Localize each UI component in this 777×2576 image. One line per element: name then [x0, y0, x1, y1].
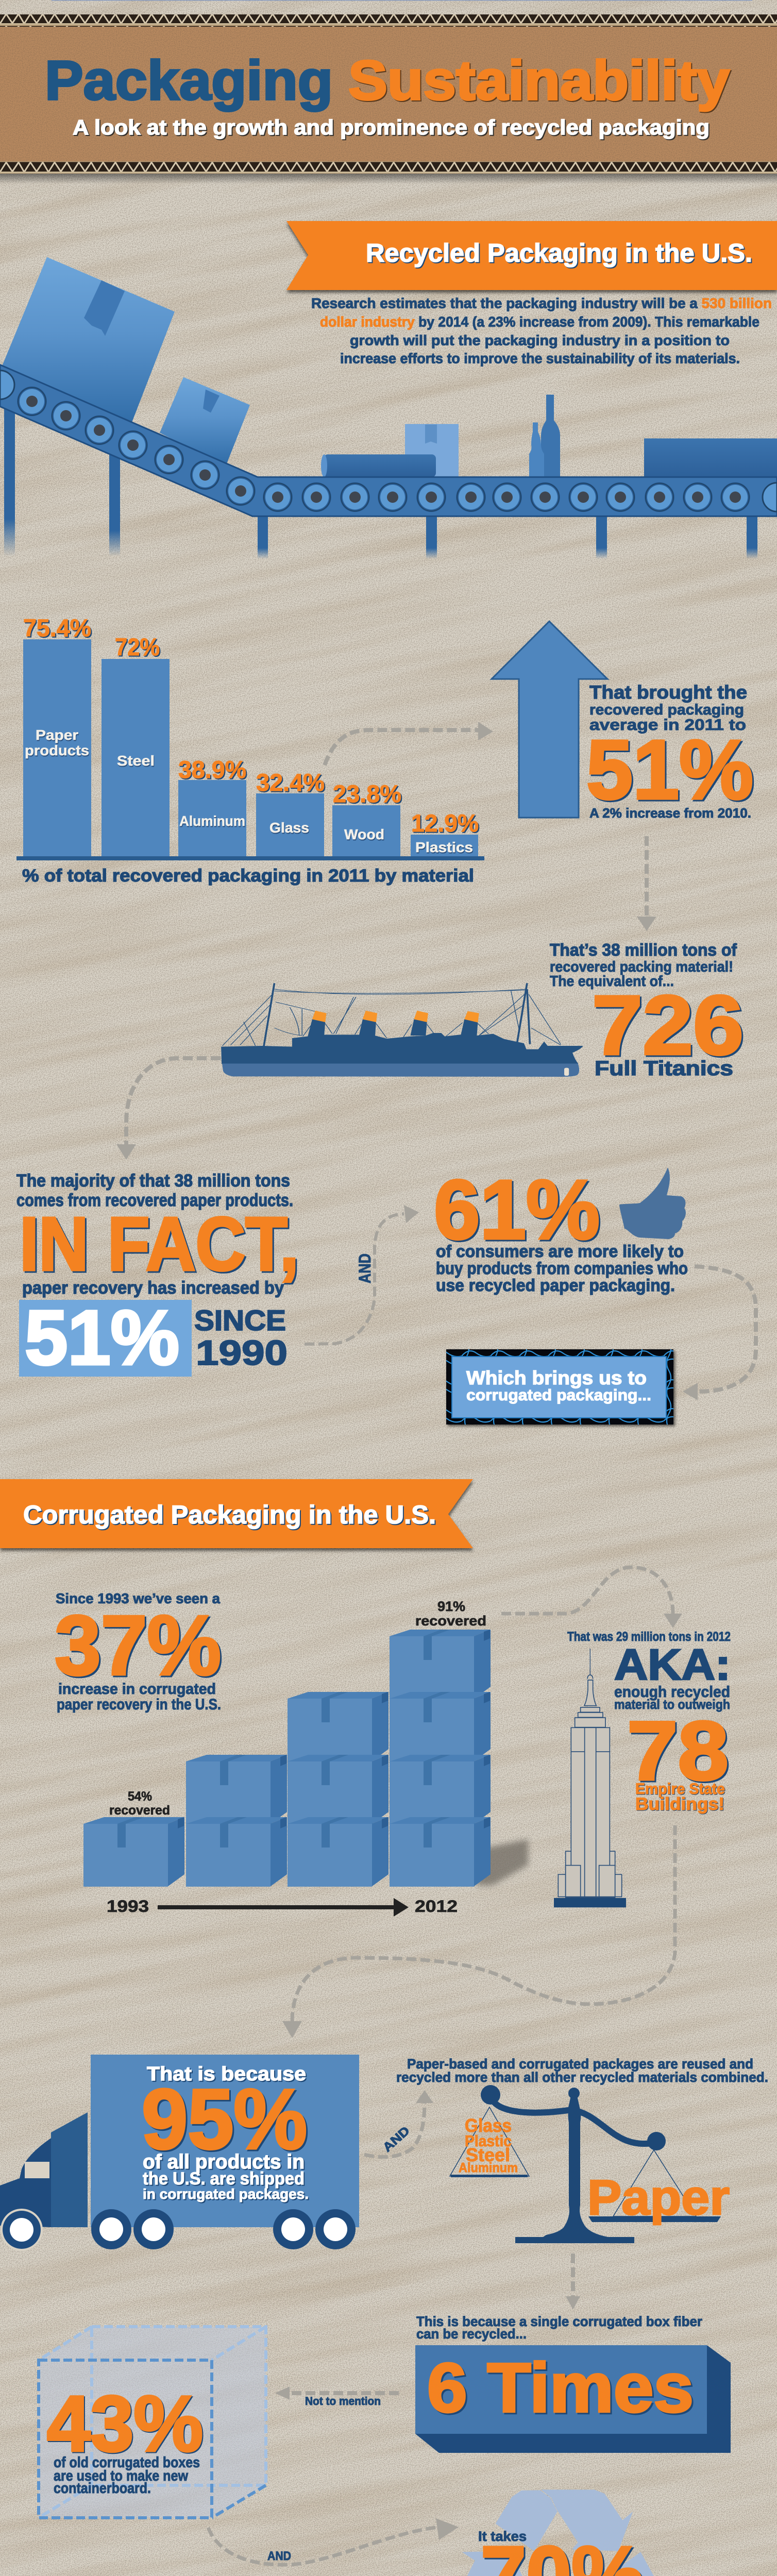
block: In fact, paper recovery: The majority of that 38 million tons: [16, 1171, 290, 1191]
bar chart: % of total recovered packaging by material: [16, 614, 484, 886]
panel: dashed box 43%: of old corrugated boxes: [54, 2454, 200, 2471]
stat: 726 Full Titanics: [550, 940, 744, 1080]
arrow: down to tons: [637, 836, 656, 931]
bars: [23, 639, 478, 856]
panel: dashed box 43%: are used to make new: [54, 2468, 188, 2484]
value labels: 72%: [115, 633, 160, 660]
stat: 78 Empire State Buildings: [567, 1630, 731, 1814]
stat: 78 Empire State Buildings: enough recycled: [614, 1683, 730, 1701]
axis: [16, 856, 484, 860]
arrow: to callout: [683, 1266, 756, 1400]
arrow: scale to 6 times: [566, 2253, 580, 2310]
text: single fiber: can be recycled...: [416, 2326, 527, 2342]
truck text: [142, 2063, 309, 2202]
arrow: not to mention: [275, 2386, 399, 2408]
icon: recycle symbol: [460, 2489, 661, 2576]
stat: 51% average: [586, 682, 753, 821]
stat: 61% consumers: use recycled paper packaging.: [436, 1276, 675, 1295]
stat: 726 Full Titanics: 726: [592, 978, 744, 1072]
text: single fiber: This is because a single corrugated box fiber: [416, 2314, 702, 2329]
bar names: Glass: [269, 820, 309, 836]
callout: which brings us to corrugated packaging: Which brings us to: [466, 1367, 647, 1388]
label 91% recovered: recovered: [415, 1613, 486, 1629]
block: In fact, paper recovery: IN FACT,: [20, 1202, 299, 1286]
column 1: [83, 1817, 184, 1887]
stat: 51% average: A 2% increase from 2010.: [589, 805, 751, 821]
callout: which brings us to corrugated packaging: corrugated packaging...: [466, 1386, 651, 1404]
stat: 51% average: That brought the: [589, 682, 747, 703]
chart caption: % of total recovered packaging in 2011 by material: [22, 866, 474, 886]
truck text: the U.S. are shipped: [143, 2169, 305, 2189]
scale right strings and pan: [588, 2150, 721, 2222]
arrow: 78 to truck: [282, 1825, 675, 2038]
stat: 78 Empire State Buildings: That was 29 million tons in 2012: [567, 1630, 731, 1644]
stat: 78 Empire State Buildings: 78: [627, 1704, 729, 1798]
stat: 37% increase: paper recovery in the U.S.: [57, 1696, 221, 1713]
conveyor belt illustration: [0, 257, 777, 559]
rollers: [0, 370, 777, 512]
arrow: truck to scale: [364, 2090, 433, 2157]
panel: 6 Times 3D box: [415, 2345, 731, 2453]
bar names: Wood: [344, 826, 384, 842]
label 54% recovered: [109, 1789, 170, 1818]
scale stand: [515, 2105, 634, 2243]
label: AND: AND: [356, 1253, 374, 1283]
value labels: [23, 614, 479, 837]
bar names: Plastics: [415, 839, 473, 855]
box shadow: [477, 1839, 528, 1886]
icon: big up arrow: [492, 621, 607, 818]
trailer: [91, 2055, 359, 2227]
bar names: [25, 727, 473, 855]
column 4: [390, 1630, 491, 1887]
arrow: chart to up arrow: [325, 722, 493, 765]
label: Not to mention: Not to mention: [305, 2395, 381, 2408]
block: In fact, paper recovery: [16, 1171, 299, 1381]
stat: 78 Empire State Buildings: Empire State: [635, 1781, 725, 1798]
truck text: 95%: [142, 2072, 307, 2166]
bar names: Aluminum: [179, 813, 245, 829]
arrow: and to 61%: [305, 1205, 419, 1344]
ship rigging: [222, 983, 561, 1047]
stat: 726 Full Titanics: That’s 38 million tons of: [550, 940, 737, 959]
value labels: 12.9%: [411, 809, 479, 837]
column 2: [186, 1755, 287, 1887]
column 3: [288, 1692, 388, 1887]
scale left strings and pan: [450, 2107, 529, 2177]
banner: Corrugated Packaging in the U.S.: [0, 1479, 473, 1548]
stat: 78 Empire State Buildings: Buildings!: [635, 1794, 724, 1814]
value labels: 38.9%: [178, 756, 246, 783]
arrow: ship to paper: [116, 1058, 221, 1160]
text: single fiber: [416, 2314, 702, 2342]
stat: 37% increase: increase in corrugated: [58, 1681, 216, 1698]
stat: 61% consumers: 61%: [434, 1162, 600, 1257]
intro paragraph: Research estimates that the packaging industry will be a 530 billion: [311, 295, 772, 311]
stat: 726 Full Titanics: recovered packing material!: [550, 959, 733, 975]
banner: Corrugated Packaging in the U.S.: Corrugated Packaging in the U.S.: [23, 1500, 436, 1529]
stat: 78 Empire State Buildings: AKA:: [614, 1640, 731, 1689]
intro paragraph: dollar industry by 2014 (a 23% increase from 2009). This remarkable: [320, 314, 759, 330]
stat: 61% consumers: buy products from companies who: [436, 1259, 688, 1278]
intro paragraph: [311, 295, 772, 366]
stat: 51% average: average in 2011 to: [589, 716, 746, 734]
right pan label: Paper: [587, 2170, 730, 2225]
panel: 51% box: [19, 1300, 192, 1377]
banner: Recycled Packaging in the U.S.: Recycled Packaging in the U.S.: [366, 239, 752, 267]
icon: thumbs up: [619, 1167, 686, 1239]
scale beam: [481, 2085, 666, 2150]
recycle arrow: top left: [496, 2490, 558, 2551]
header: corrugated cardboard title band: [0, 14, 777, 184]
stat: 37% increase: Since 1993 we’ve seen a: [56, 1590, 220, 1606]
timeline: 2012: [415, 1897, 458, 1916]
panel: 6 Times 3D box: 6 Times: [427, 2349, 694, 2427]
block: In fact, paper recovery: paper recovery has increased by: [22, 1278, 284, 1298]
panel: dashed box 43%: containerboard.: [54, 2480, 151, 2497]
stat: 61% consumers: [434, 1162, 688, 1295]
banner: Recycled Packaging in the U.S.: [286, 221, 777, 290]
timeline: 1993: [107, 1897, 149, 1916]
truck cab rear: [51, 2112, 88, 2227]
stat: 51% average: recovered packaging: [589, 702, 744, 718]
icon: large tilted box: [0, 257, 175, 428]
stat: 78 Empire State Buildings: material to outweigh: [614, 1697, 730, 1712]
conveyor belt frame: [0, 365, 777, 516]
stat: 61% consumers: of consumers are more likely to: [436, 1242, 684, 1261]
conveyor legs: [4, 407, 757, 559]
icon: small tilted box: [160, 377, 250, 466]
stat: 51% average: 51%: [586, 722, 753, 817]
intro paragraph: growth will put the packaging industry in a position to: [350, 332, 730, 348]
label: AND: AND: [380, 2124, 413, 2155]
truck text: of all products in: [143, 2151, 305, 2173]
chart: stacked boxes 1993 to 2012: [83, 1599, 528, 1917]
callout: which brings us to corrugated packaging: [446, 1349, 673, 1425]
icon: balance scale: [450, 2085, 730, 2243]
truck text: in corrugated packages.: [143, 2186, 309, 2202]
label 91% recovered: 91%: [437, 1599, 465, 1614]
stat: 51%: 51%: [25, 1294, 179, 1381]
year: 1990: [196, 1333, 288, 1372]
left pan labels: Glass: [465, 2115, 512, 2136]
text: paper-based packages: [396, 2056, 768, 2085]
funnels: [308, 1019, 478, 1038]
label 91% recovered: [415, 1599, 486, 1629]
dashed front edges: [39, 2360, 266, 2518]
arrow: boxes to empire state: [501, 1567, 682, 1628]
bar names: products: [25, 742, 89, 758]
arrow: and to 70%: [208, 2518, 459, 2565]
subtitle: A look at the growth and prominence of recycled packaging: [73, 115, 710, 139]
bar names: Steel: [117, 753, 155, 769]
value labels: 23.8%: [333, 780, 401, 807]
truck text: That is because: [147, 2063, 306, 2085]
stat: 37% increase: 37%: [55, 1598, 221, 1692]
text: paper-based packages: Paper-based and corrugated packages are reused and: [407, 2056, 753, 2072]
recycle arrow: top right: [541, 2489, 633, 2551]
icon: Titanic ship: [221, 983, 583, 1077]
title accent: Sustainability: [348, 49, 730, 111]
icon: Empire State Building: [554, 1649, 626, 1907]
label: AND: AND: [267, 2549, 291, 2563]
funnel tops: [312, 1011, 479, 1023]
text: paper-based packages: recycled more than all other recycled materials combined.: [396, 2070, 768, 2085]
value labels: 75.4%: [23, 614, 91, 641]
icon: truck with 95% stat: [0, 2055, 359, 2251]
left pan labels: Plastic: [465, 2132, 512, 2150]
left pan labels: [459, 2115, 518, 2175]
panel: dashed box 43%: [39, 2327, 266, 2518]
wheels: [1, 2209, 356, 2251]
value labels: 32.4%: [256, 769, 325, 796]
recycle arrow: left: [460, 2551, 531, 2576]
cab window: [25, 2162, 49, 2178]
stat: 70% less energy: It takes: [478, 2529, 527, 2544]
left pan labels: Aluminum: [459, 2160, 518, 2175]
icon: tube: [321, 454, 436, 477]
ship hull lower: [222, 1063, 579, 1077]
label 54% recovered: 54%: [128, 1789, 152, 1804]
label 54% recovered: recovered: [109, 1803, 170, 1818]
since: SINCE: [194, 1304, 286, 1336]
timeline: [107, 1897, 458, 1917]
intro paragraph: increase efforts to improve the sustainability of its materials.: [340, 350, 740, 366]
panel: dashed box 43%: 43%: [47, 2380, 203, 2468]
icon: large crate on belt: [644, 438, 777, 477]
stat: 726 Full Titanics: The equivalent of...: [550, 973, 674, 990]
dashed back edges: [39, 2327, 266, 2518]
icon: bottles: [529, 395, 560, 477]
left pan labels: Steel: [466, 2144, 510, 2165]
stat: 726 Full Titanics: Full Titanics: [595, 1057, 733, 1080]
bar names: Paper: [36, 727, 78, 743]
truck cab front: [0, 2138, 51, 2227]
ship hull upper: [221, 1033, 583, 1064]
title: Packaging: [45, 49, 333, 111]
icon: light upright box: [405, 424, 459, 477]
recycle arrow: right: [596, 2552, 661, 2576]
block: In fact, paper recovery: comes from recovered paper products.: [16, 1191, 293, 1210]
